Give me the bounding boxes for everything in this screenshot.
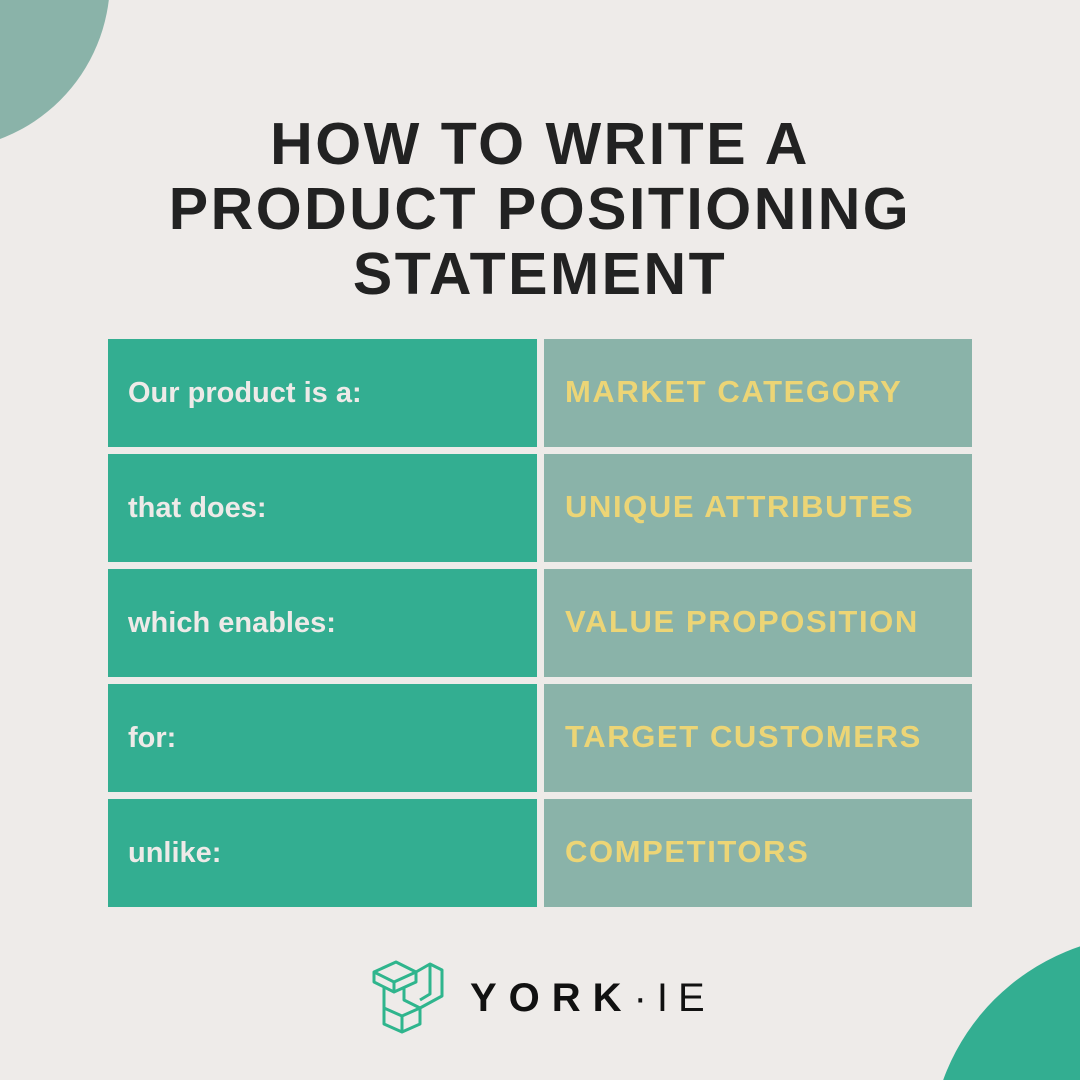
title: PRODUCT POSITIONING [169, 176, 911, 242]
row 2 [108, 454, 537, 562]
row 5 value: COMPETITORS [565, 834, 809, 869]
row 3 value [544, 569, 972, 677]
brand name: YORK·IE [470, 976, 715, 1020]
row 1 value [544, 339, 972, 447]
row 3: which enables: [128, 607, 336, 639]
title: STATEMENT [353, 241, 727, 307]
row 1 value: MARKET CATEGORY [565, 374, 902, 409]
title: HOW TO WRITE A [270, 111, 810, 177]
row 4 [108, 684, 537, 792]
row 2 value [544, 454, 972, 562]
row 5 value [544, 799, 972, 907]
row 2 value: UNIQUE ATTRIBUTES [565, 489, 914, 524]
row 4: for: [128, 722, 176, 754]
title [169, 111, 911, 307]
row 3 value: VALUE PROPOSITION [565, 604, 919, 639]
row 5: unlike: [128, 837, 221, 869]
logo [372, 960, 715, 1034]
row 4 value [544, 684, 972, 792]
icon: york cube logo [372, 960, 444, 1034]
table: positioning statement [108, 339, 972, 907]
row 1: Our product is a: [128, 377, 362, 409]
row 4 value: TARGET CUSTOMERS [565, 719, 922, 754]
row 5 [108, 799, 537, 907]
row 1 [108, 339, 537, 447]
row 2: that does: [128, 492, 267, 524]
row 3 [108, 569, 537, 677]
